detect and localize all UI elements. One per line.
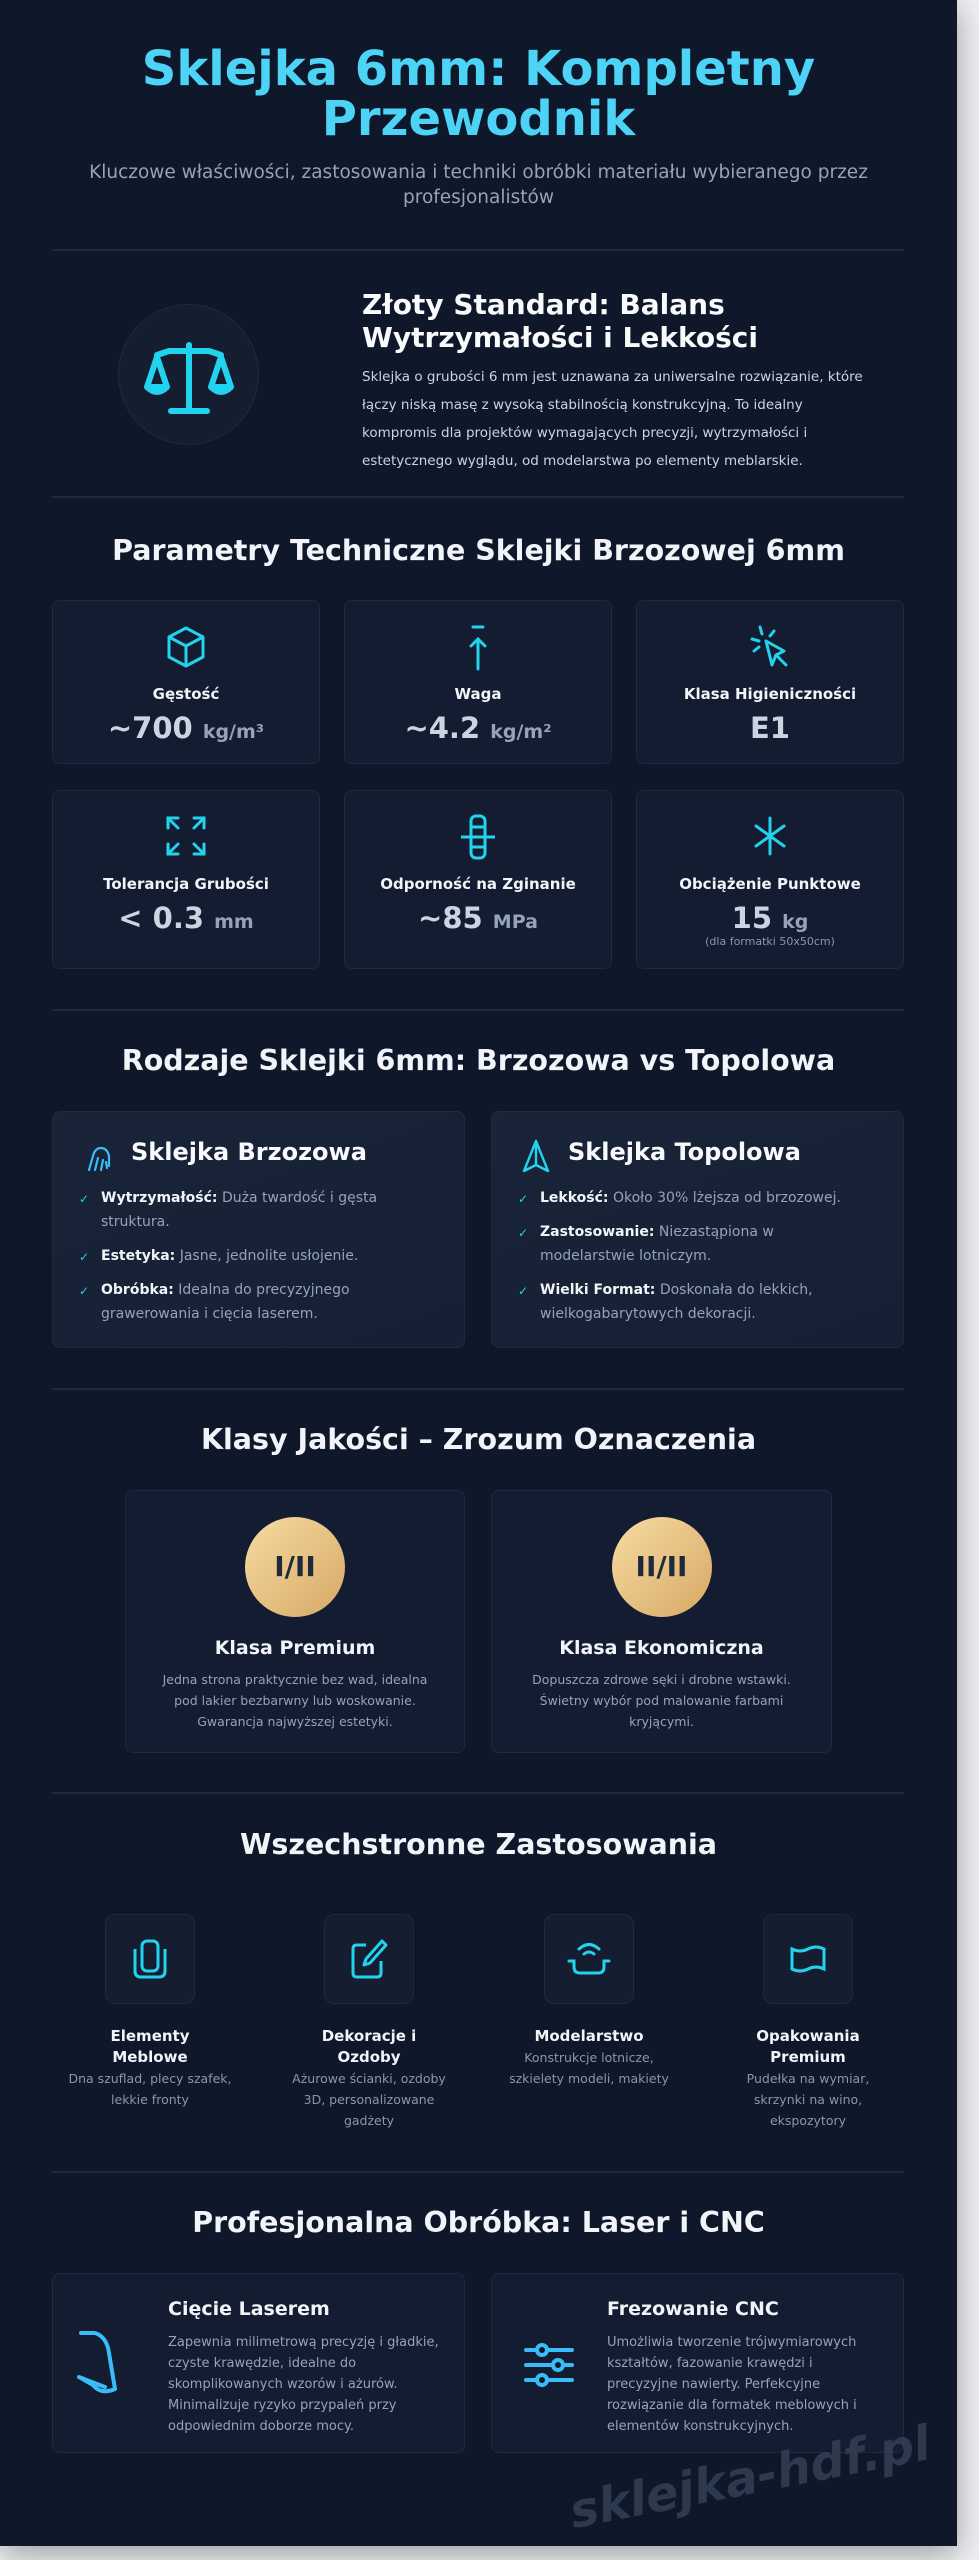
card: odporność: Odporność na Zginanie [380,875,576,893]
list [80,1190,377,1322]
card: obciążenie: 15 kg [732,901,808,935]
card: gęstość: Gęstość [153,685,219,703]
card: ekonomiczna: Dopuszcza zdrowe sęki i drobne wstawki. Świetny wybór pod malowanie farbami kryjącymi. [532,1672,791,1729]
card: brzozowa [52,1111,465,1348]
icon: cube [168,626,204,668]
card: premium: Klasa Premium [215,1637,375,1659]
card: ekonomiczna: Klasa Ekonomiczna [559,1637,764,1659]
card: laser [52,2273,465,2453]
medal [245,1517,345,1617]
icon: triangle [522,1140,550,1172]
list: Zastosowanie: Niezastąpiona w modelarstwie lotniczym. [540,1224,774,1264]
hero text: kompromis dla projektów wymagających precyzji, wytrzymałości i estetycznego wyglądu, od modelarstwa po elementy meblarskie. [362,425,807,469]
list [520,1190,841,1322]
card: klasa higieniczności [636,600,904,764]
hero text: Sklejka o grubości 6 mm jest uznawana za uniwersalne rozwiązanie, które łączy niską masę z wysoką stabilnością konstrukcyjną. To idealny [362,369,863,413]
app: dekoracje: Ażurowe ścianki, ozdoby 3D, personalizowane gadżety [292,2071,446,2128]
card: klasa higieniczności: Klasa Higieniczności [684,685,856,703]
card: cnc [491,2273,904,2453]
icon: arrow up [469,626,487,670]
hero heading [362,288,758,354]
card: tolerancja [52,790,320,969]
card: obciążenie: (dla formatki 50x50cm) [705,935,835,948]
card: waga: Waga [454,685,502,703]
medal: I/II [274,1550,316,1583]
icon: expand arrows [166,816,206,856]
card: premium [125,1490,465,1753]
card: laser: Zapewnia milimetrową precyzję i gładkie, czyste krawędzie, idealne do skomplikowanych wzorów i ażurów. Minimalizuje ryzyko przypaleń przy odpowiednim doborze mocy. [168,2335,439,2434]
title: Przewodnik [322,91,635,147]
card: waga [344,600,612,764]
list: Estetyka: Jasne, jednolite usłojenie. [101,1248,358,1264]
card: cnc: Umożliwia tworzenie trójwymiarowych kształtów, fazowanie krawędzi i precyzyjne nawierty. Perfekcyjne rozwiązanie dla formatek meblowych i elementów konstrukcyjnych. [607,2335,857,2434]
card: klasa higieniczności: E1 [750,711,790,745]
icon: asterisk [754,816,786,856]
title [142,41,815,147]
card: odporność [344,790,612,969]
heading: obróbka: Profesjonalna Obróbka: Laser i CNC [192,2206,765,2239]
heading: zastosowania: Wszechstronne Zastosowania [240,1828,717,1861]
app: opakowania: Pudełka na wymiar, skrzynki na wino, ekspozytory [747,2071,869,2128]
card: waga: ~4.2 kg/m² [404,711,552,745]
icon: tree [88,1146,110,1172]
heading: rodzaje: Rodzaje Sklejki 6mm: Brzozowa vs Topolowa [122,1044,835,1077]
hero heading: Złoty Standard: Balans [362,288,725,321]
list: Lekkość: Około 30% lżejsza od brzozowej. [540,1190,841,1206]
app: modelarstwo: Modelarstwo [534,2027,644,2045]
app: modelarstwo [509,1914,669,2086]
list: Wielki Format: Doskonała do lekkich, wielkogabarytowych dekoracji. [540,1282,813,1322]
app: meblowe: Elementy Meblowe [110,2027,190,2066]
app: modelarstwo: Konstrukcje lotnicze, szkielety modeli, makiety [509,2050,669,2086]
card: premium: Jedna strona praktycznie bez wad, idealna pod lakier bezbarwny lub woskowanie. Gwarancja najwyższej estetyki. [163,1672,427,1729]
hero icon: scales [118,304,259,445]
icon: cursor click [750,626,788,667]
title: Sklejka 6mm: Kompletny [142,41,815,97]
list: Obróbka: Idealna do precyzyjnego grawerowania i cięcia laserem. [101,1282,350,1322]
medal [612,1517,712,1617]
app: meblowe: Dna szuflad, plecy szafek, lekkie fronty [68,2071,231,2107]
subtitle: Kluczowe właściwości, zastosowania i techniki obróbki materiału wybieranego przez profesjonalistów [89,162,868,208]
app: opakowania [747,1914,869,2128]
heading: parametry: Parametry Techniczne Sklejki Brzozowej 6mm [112,534,845,567]
card: obciążenie [636,790,904,969]
app: dekoracje [292,1914,446,2128]
card: laser: Cięcie Laserem [168,2298,330,2320]
watermark: sklejka-hdf.pl [565,2415,935,2540]
icon: sliders [524,2343,574,2387]
heading: klasy: Klasy Jakości – Zrozum Oznaczenia [201,1423,756,1456]
card: obciążenie: Obciążenie Punktowe [679,875,861,893]
medal: II/II [636,1550,687,1583]
hero heading: Wytrzymałości i Lekkości [362,321,758,354]
icon: laser [76,2331,117,2394]
card: ekonomiczna [491,1490,832,1753]
icon: bend [461,814,495,860]
card: cnc: Frezowanie CNC [607,2298,779,2320]
card: topolowa: Sklejka Topolowa [568,1138,801,1166]
card: gęstość [52,600,320,764]
app: meblowe [68,1914,231,2107]
hero text [362,369,863,469]
card: gęstość: ~700 kg/m³ [108,711,264,745]
app: opakowania: Opakowania Premium [756,2027,860,2066]
card: brzozowa: Sklejka Brzozowa [131,1138,367,1166]
app: dekoracje: Dekoracje i Ozdoby [322,2027,416,2066]
card: tolerancja: Tolerancja Grubości [103,875,269,893]
card: tolerancja: < 0.3 mm [118,901,254,935]
card: topolowa [491,1111,904,1348]
list: Wytrzymałość: Duża twardość i gęsta struktura. [101,1190,377,1230]
card: odporność: ~85 MPa [418,901,538,935]
